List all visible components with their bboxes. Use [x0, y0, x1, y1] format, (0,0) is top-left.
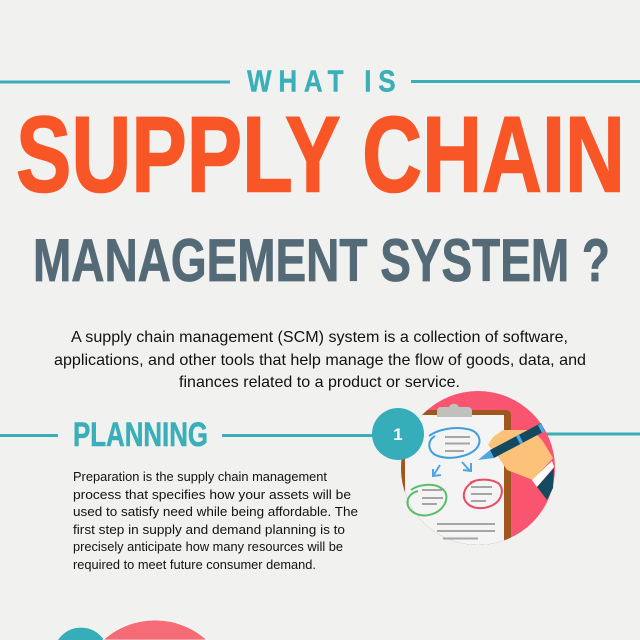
planning text: used to satisfy need while being affordable. The [73, 505, 358, 519]
icon: clipboard and hand illustration [401, 391, 555, 545]
intro text: applications, and other tools that help manage the flow of goods, data, and [54, 352, 586, 369]
intro text [54, 329, 586, 391]
heading: planning: PLANNING [73, 416, 208, 454]
badge: number 1: 1 [393, 425, 403, 444]
intro text: finances related to a product or service. [179, 374, 460, 391]
intro text: A supply chain management (SCM) system is a collection of software, [71, 329, 568, 346]
badge: number 1 [372, 408, 424, 460]
planning text [73, 470, 358, 572]
heading: what is: WHAT IS [247, 64, 396, 99]
next section circles [58, 620, 207, 640]
planning text: first step in supply and demand planning is to [73, 523, 345, 537]
planning text: required to meet future consumer demand. [73, 558, 316, 572]
planning text: process that specifies how your assets will be [73, 488, 351, 502]
planning text: precisely anticipate how many resources will be [73, 540, 343, 554]
planning text: Preparation is the supply chain management [73, 470, 328, 484]
